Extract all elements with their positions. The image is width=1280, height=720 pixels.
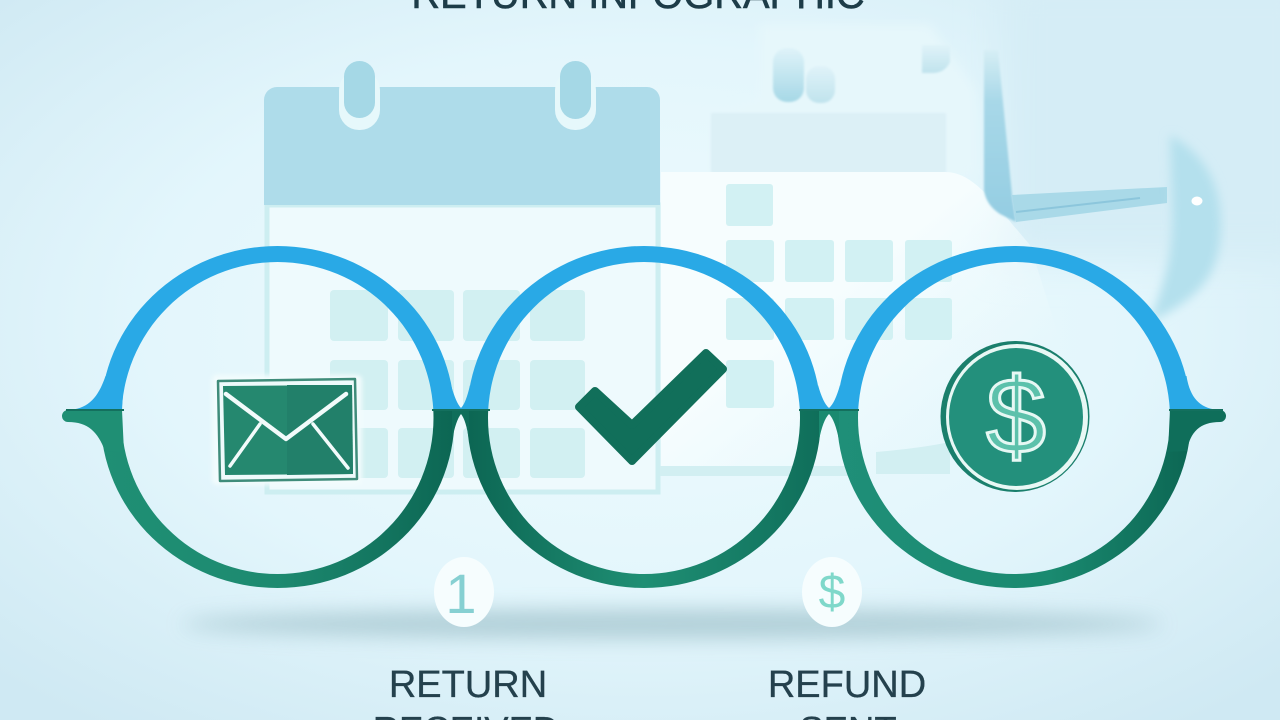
connectors and end flares xyxy=(62,376,1226,452)
icon: check mark xyxy=(579,353,723,461)
ring 1 xyxy=(100,246,455,588)
ring chain: three connected circles xyxy=(62,246,1226,588)
ring 2 xyxy=(467,246,821,588)
background: tinted top right area xyxy=(1000,0,1280,260)
icon: envelope xyxy=(212,375,362,485)
icon: dollar coin: $ xyxy=(986,355,1046,476)
step badge: dollar: $ xyxy=(819,566,845,619)
ring 3 xyxy=(837,246,1191,588)
background: large back calendar xyxy=(264,61,660,492)
label: return received xyxy=(373,664,559,720)
step badge: 1: 1 xyxy=(445,562,477,625)
label: refund sent: REFUND xyxy=(768,664,926,706)
ground shadow xyxy=(182,609,1162,639)
label: return received: RETURN xyxy=(389,664,547,706)
icon: dollar coin xyxy=(940,341,1090,492)
background: blurred arm and arc xyxy=(773,45,1221,322)
background: ghost second calendar xyxy=(660,25,1060,476)
step badge: dollar xyxy=(802,557,862,627)
step badge: 1 xyxy=(434,557,494,627)
